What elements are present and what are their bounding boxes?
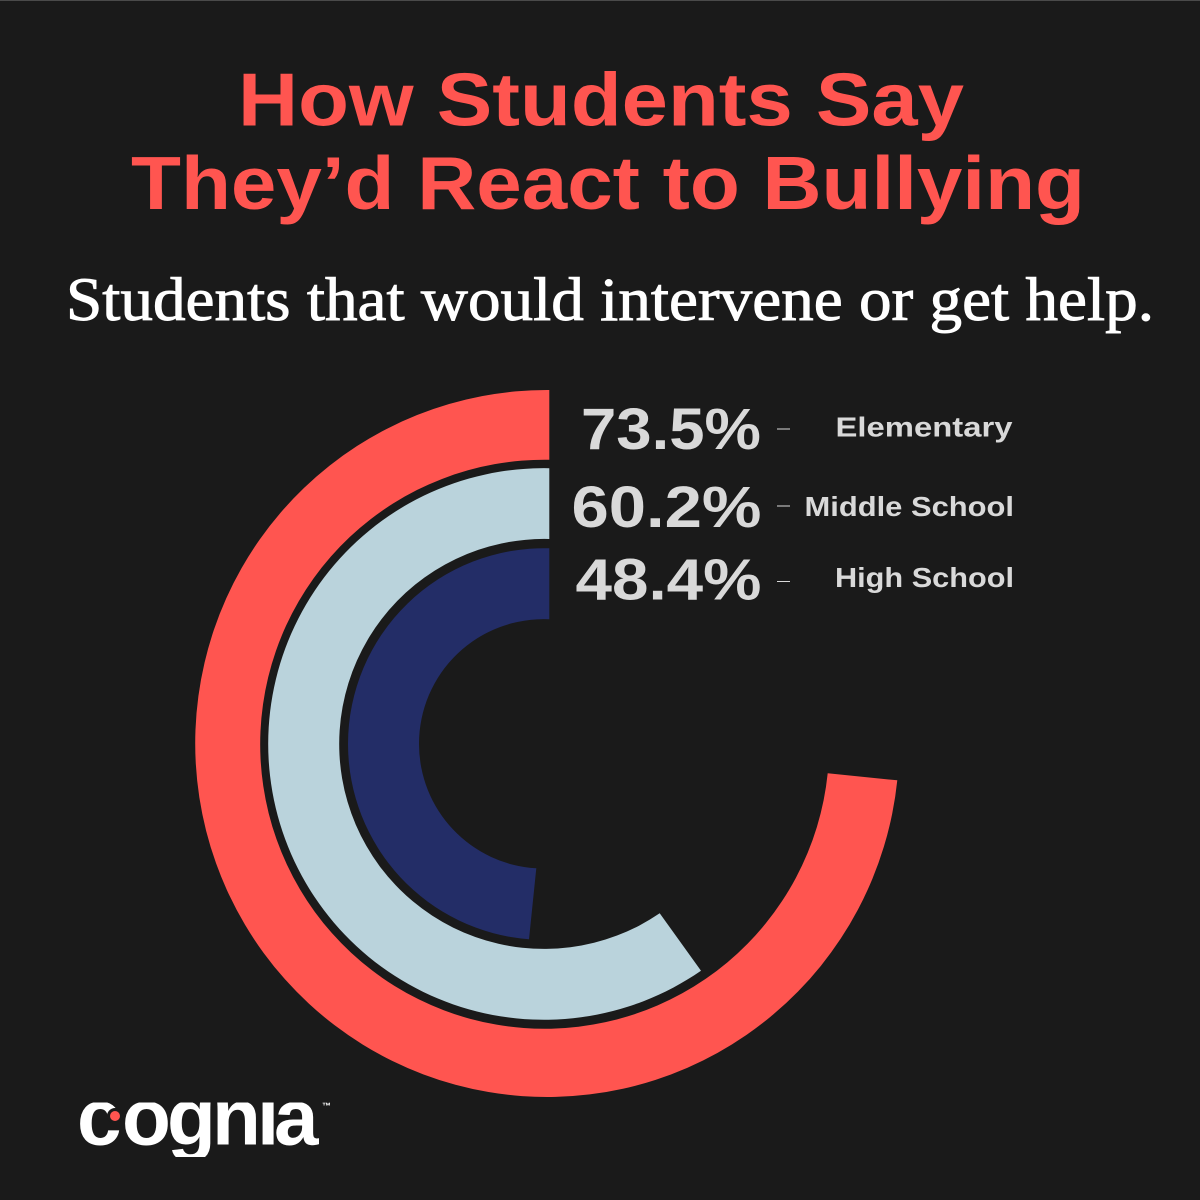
legend: elementary [581,397,1013,462]
legend: elementary: 73.5% [581,397,761,462]
title: They’d React to Bullying [131,141,1085,225]
legend: high school: 48.4% [576,548,762,612]
subtitle: Students that would intervene or get help. [66,267,1154,334]
logo: cognia: ™ [322,1101,331,1111]
legend: middle school [572,475,1014,540]
legend: elementary: Elementary [836,412,1013,442]
logo: cognia: cognia [77,1072,319,1162]
radial bar chart [195,390,897,1097]
legend: high school: High School [835,562,1014,593]
legend: middle school: Middle School [804,491,1014,522]
logo: cognia [80,1102,330,1157]
legend: high school [576,548,1014,612]
arc: elementary 73.5% [195,390,897,1097]
title: How Students Say [238,58,964,142]
title [131,58,1085,225]
legend: middle school: 60.2% [572,475,762,540]
arc: high school 48.4% [348,548,549,939]
arc: middle school 60.2% [268,468,701,1020]
